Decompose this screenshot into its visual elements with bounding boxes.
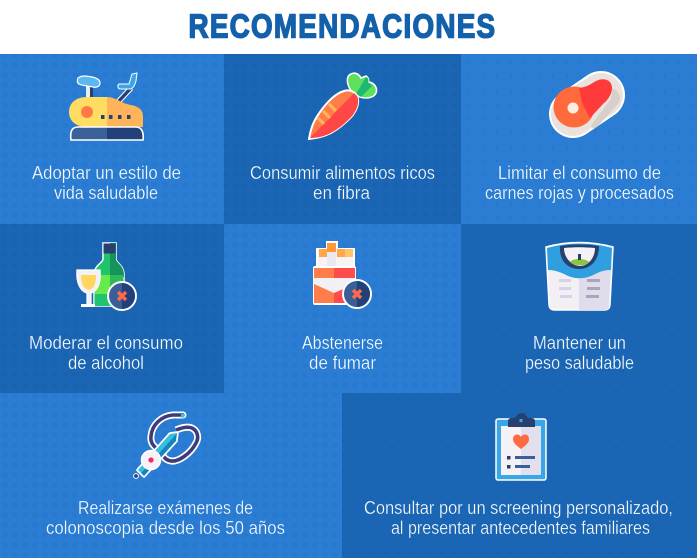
text: fibra: en fibra	[313, 183, 371, 203]
icon: carrot	[309, 73, 377, 139]
panel: screening	[342, 393, 697, 558]
text: carnes	[485, 163, 674, 203]
text: peso: peso saludable	[525, 353, 634, 373]
text: screening: al presentar antecedentes familiares	[391, 518, 650, 538]
panel: estilo de vida saludable	[0, 54, 224, 224]
text: alcohol	[29, 333, 183, 373]
text: colonoscopia	[46, 498, 285, 538]
icon: meat	[554, 79, 620, 128]
text: adoptar	[32, 163, 181, 203]
panel: fumar	[224, 224, 461, 393]
icon: exercise bike	[69, 73, 143, 140]
text: alcohol: de alcohol	[68, 353, 144, 373]
title: RECOMENDACIONES	[188, 8, 496, 45]
text: carnes: carnes rojas y procesados	[485, 183, 674, 203]
text: fibra: Consumir alimentos ricos	[250, 163, 435, 183]
text: fibra	[250, 163, 435, 203]
text: fumar	[302, 333, 383, 373]
icon: cigarette pack	[314, 242, 371, 308]
icon: endoscope	[134, 414, 198, 478]
text: alcohol: Moderar el consumo	[29, 333, 183, 353]
panel: fibra	[224, 54, 461, 224]
text: colonoscopia: Realizarse exámenes de	[78, 498, 253, 518]
icon: bottle and glass	[77, 243, 136, 310]
text: screening: Consultar por un screening personalizado,	[364, 498, 673, 518]
text: fumar: de fumar	[309, 353, 376, 373]
panel: alcohol	[0, 224, 224, 393]
text: fumar: Abstenerse	[302, 333, 383, 353]
text: peso	[525, 333, 634, 373]
panel: carnes	[461, 54, 697, 224]
text: adoptar: vida saludable	[54, 183, 158, 203]
panel: colonoscopia	[0, 393, 342, 558]
text: peso: Mantener un	[533, 333, 626, 353]
text: screening	[364, 498, 673, 538]
icon: clipboard	[496, 413, 546, 480]
text: carnes: Limitar el consumo de	[498, 163, 661, 183]
text: adoptar: Adoptar un estilo de	[32, 163, 181, 183]
icon: weight scale	[546, 242, 613, 310]
panel: peso	[461, 224, 697, 393]
text: colonoscopia: colonoscopia desde los 50 años	[46, 518, 285, 538]
